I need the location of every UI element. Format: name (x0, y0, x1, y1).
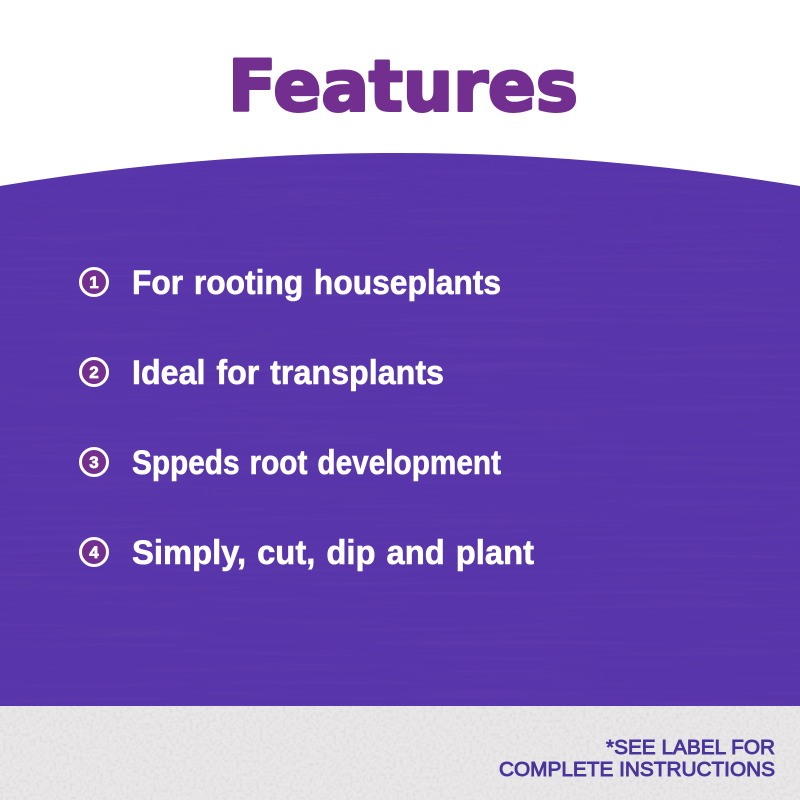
feature 1 (80, 264, 501, 302)
feature 4 (80, 534, 534, 572)
feature text 2: Ideal for transplants (132, 354, 444, 392)
feature text 4: Simply, cut, dip and plant (132, 534, 534, 572)
icon: number 4 badge: 4 (89, 543, 99, 562)
icon: number 4 badge (80, 538, 108, 566)
icon: number 3 badge: 3 (89, 453, 99, 472)
icon: number 2 badge: 2 (89, 363, 99, 382)
footnote: *SEE LABEL FOR (606, 737, 775, 759)
icon: number 2 badge (80, 358, 108, 386)
footnote (499, 737, 775, 781)
panel: purple features background (0, 150, 800, 706)
footnote: COMPLETE INSTRUCTIONS (499, 759, 775, 781)
feature 3 (80, 444, 501, 482)
panel: plaster footer (0, 706, 800, 800)
icon: number 1 badge: 1 (89, 273, 99, 292)
feature list (80, 264, 534, 572)
title: Features (228, 46, 578, 128)
feature text 3: Sppeds root development (132, 444, 501, 482)
feature 2 (80, 354, 444, 392)
icon: number 3 badge (80, 448, 108, 476)
icon: number 1 badge (80, 268, 108, 296)
feature text 1: For rooting houseplants (132, 264, 501, 302)
